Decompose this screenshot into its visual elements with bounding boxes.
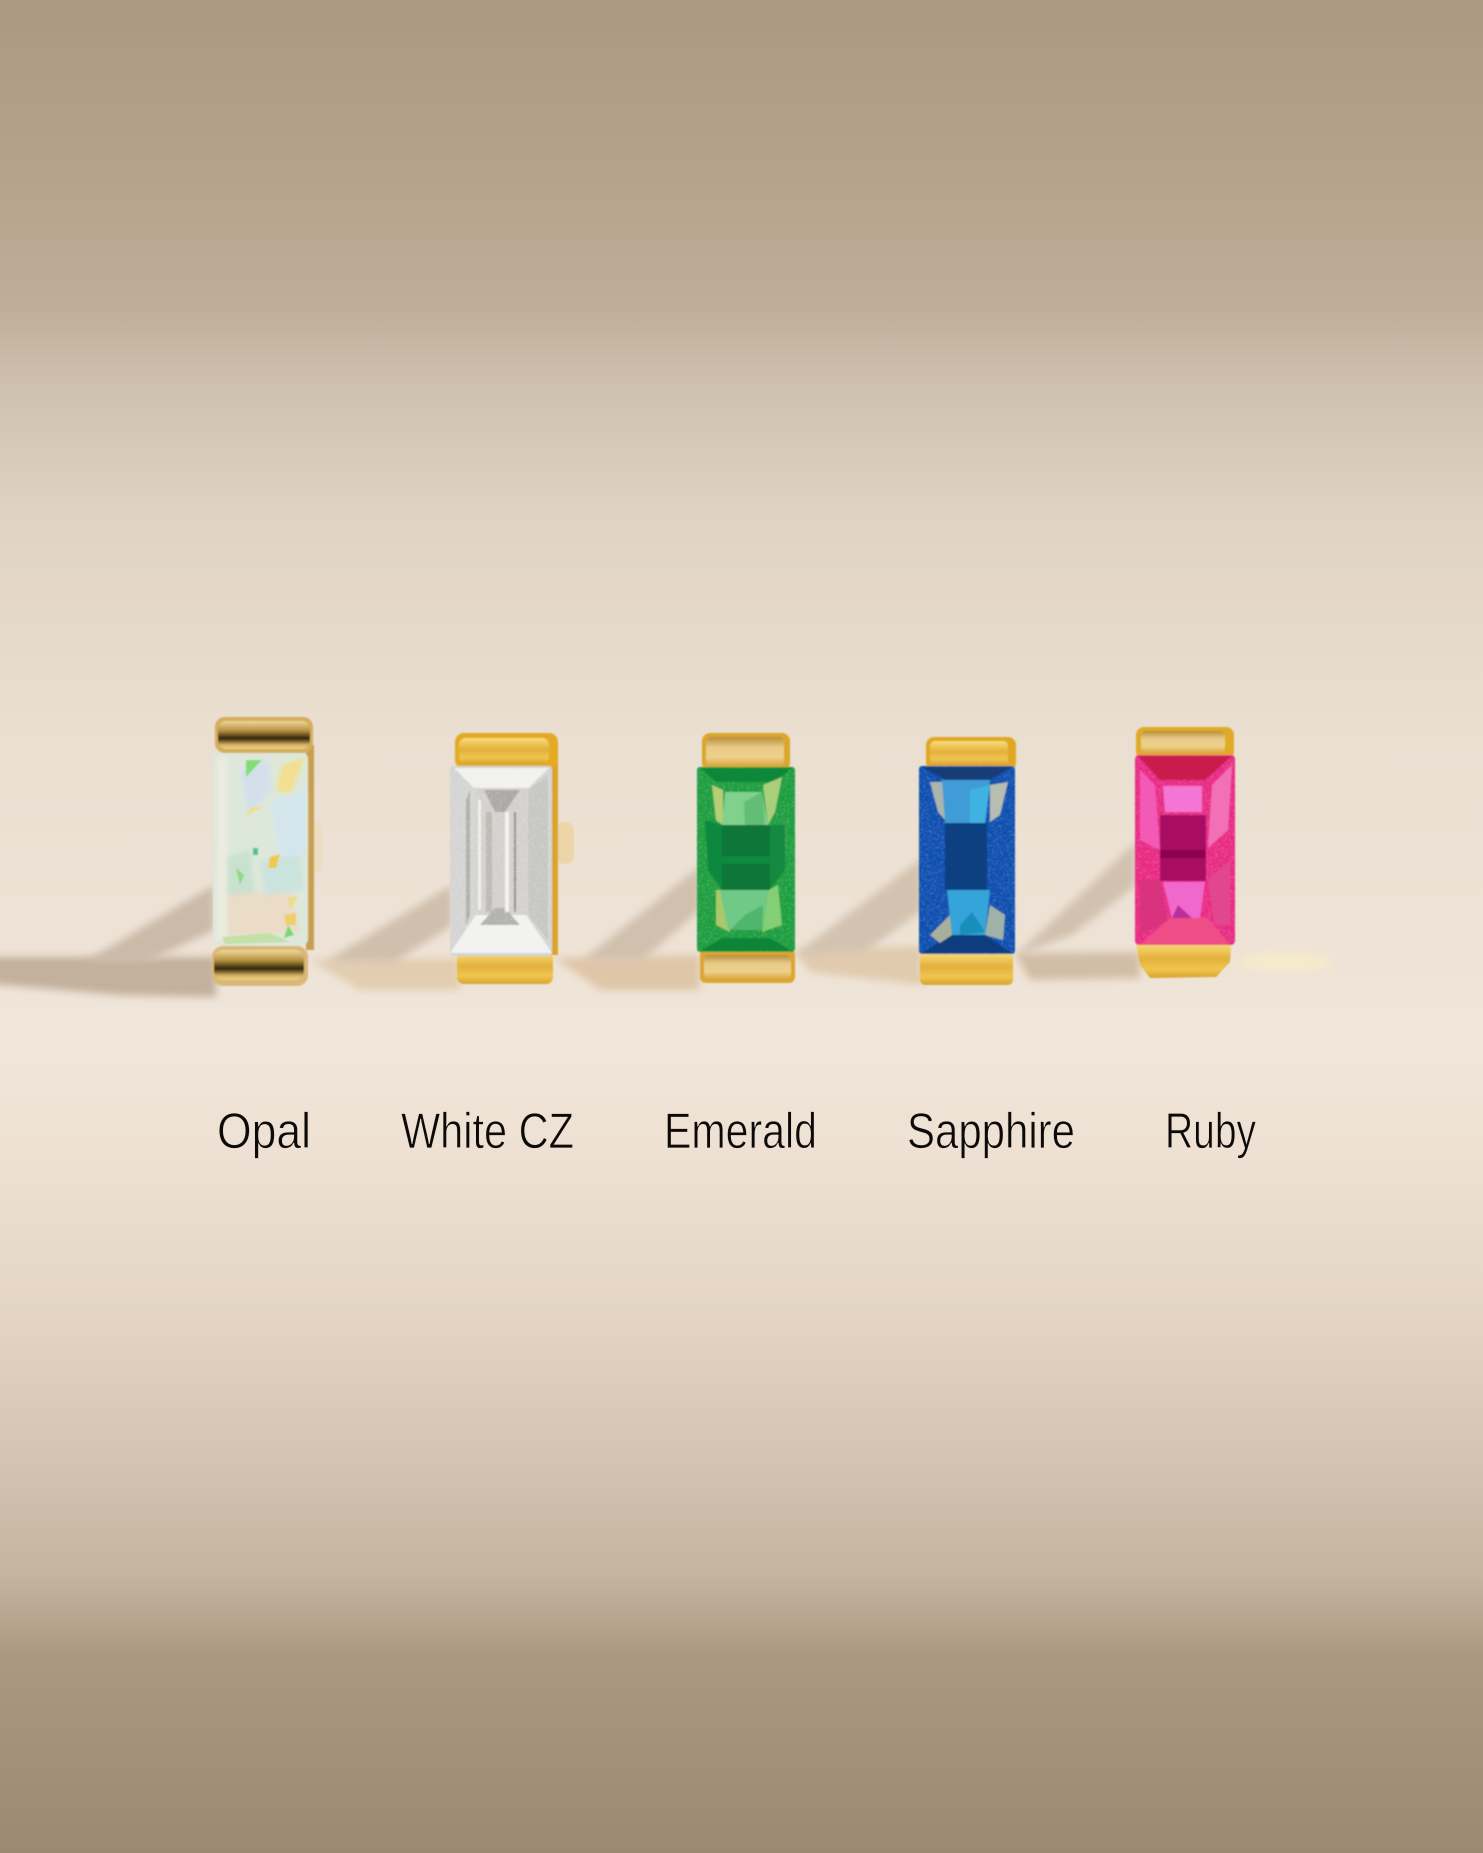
label: White CZ: White CZ [401, 1103, 574, 1159]
gold bars [455, 733, 558, 984]
earring: opal [212, 717, 322, 986]
label: Emerald: Emerald [664, 1103, 817, 1159]
label: Sapphire: Sapphire [907, 1103, 1075, 1159]
ruby stone [1135, 755, 1235, 945]
sapphire stone [919, 766, 1015, 954]
earring: ruby [1135, 727, 1235, 978]
gold bars [212, 717, 313, 986]
white CZ stone [450, 766, 552, 956]
earring: white CZ [450, 733, 574, 984]
label: Ruby: Ruby [1165, 1103, 1256, 1159]
label: Opal: Opal [217, 1103, 311, 1159]
gold bars [700, 733, 795, 983]
emerald stone [697, 767, 795, 952]
earring: emerald [697, 733, 795, 983]
earring: sapphire [919, 737, 1016, 985]
cast shadows [0, 842, 1333, 997]
opal stone [213, 753, 308, 945]
gold bars [920, 737, 1016, 985]
gold bars [1136, 727, 1234, 978]
